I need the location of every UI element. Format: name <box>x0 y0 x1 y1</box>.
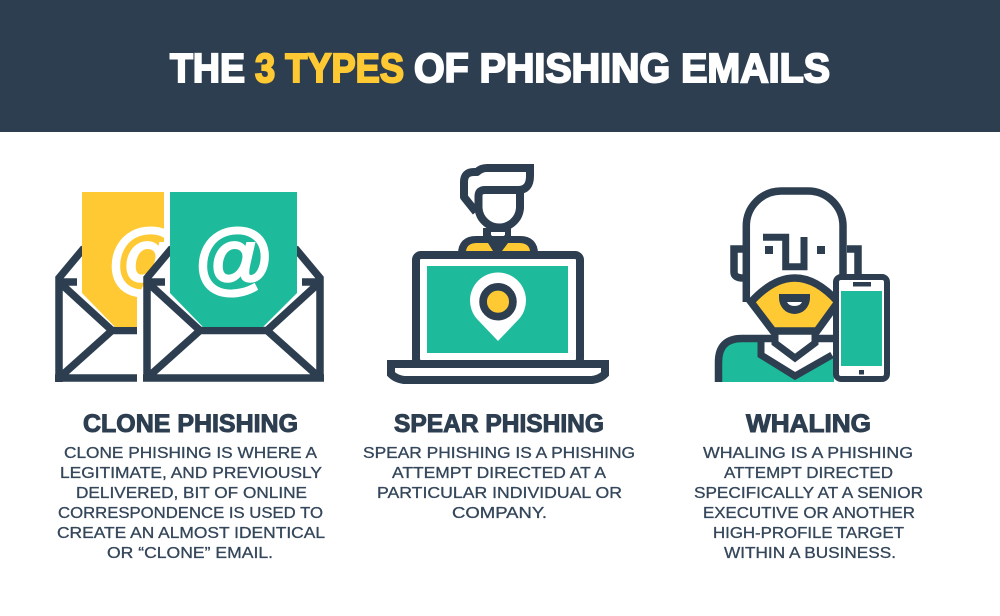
beard <box>751 278 838 331</box>
icon: bearded executive with phone <box>718 191 887 382</box>
heading: clone phishing: CLONE PHISHING <box>83 410 298 438</box>
title <box>170 45 830 91</box>
title: OF PHISHING EMAILS <box>414 45 830 91</box>
shirt <box>718 338 834 382</box>
front envelope with teal sheet: @ <box>194 213 274 302</box>
laptop base <box>391 364 605 380</box>
heading: whaling: WHALING <box>746 410 871 438</box>
laptop screen <box>416 255 580 364</box>
text block: spear phishing description <box>363 445 635 522</box>
icon: cloned envelopes <box>55 192 324 388</box>
text block: clone phishing description: OR “CLONE” EMAIL. <box>107 545 273 562</box>
text block: whaling description: SPECIFICALLY AT A SENIOR <box>694 485 923 502</box>
head <box>746 191 843 302</box>
text block: whaling description: HIGH-PROFILE TARGET <box>713 525 904 542</box>
title: 3 TYPES <box>255 45 404 91</box>
face: brow and nose <box>763 237 804 267</box>
text block: whaling description: WHALING IS A PHISHING <box>703 445 913 462</box>
ears <box>734 249 743 278</box>
text block: spear phishing description: COMPANY. <box>452 505 547 522</box>
text block: whaling description <box>694 445 923 562</box>
header banner <box>0 0 1000 132</box>
person <box>462 164 534 254</box>
icon: map pin <box>470 272 526 341</box>
back envelope with yellow sheet: @ <box>107 213 187 302</box>
text block: clone phishing description: LEGITIMATE, AND PREVIOUSLY <box>60 465 322 482</box>
text block: whaling description: WITHIN A BUSINESS. <box>724 545 896 562</box>
text block: clone phishing description: CLONE PHISHING IS WHERE A <box>64 445 317 462</box>
text block: clone phishing description: CREATE AN ALMOST IDENTICAL <box>57 525 325 542</box>
icon: person at laptop <box>391 164 605 380</box>
back envelope with yellow sheet <box>55 192 187 388</box>
eyes <box>765 246 825 254</box>
text block: whaling description: ATTEMPT DIRECTED <box>724 465 893 482</box>
text block: whaling description: EXECUTIVE OR ANOTHER <box>703 505 915 522</box>
heading: spear phishing: SPEAR PHISHING <box>394 410 604 438</box>
text block: spear phishing description: ATTEMPT DIRECTED AT A <box>392 465 606 482</box>
icon: smartphone <box>836 277 887 379</box>
mouth <box>779 294 810 314</box>
text block: clone phishing description <box>57 445 325 562</box>
front envelope with teal sheet <box>143 192 324 378</box>
text block: spear phishing description: PARTICULAR INDIVIDUAL OR <box>377 485 622 502</box>
text block: clone phishing description: CORRESPONDENCE IS USED TO <box>58 505 323 522</box>
text block: clone phishing description: DELIVERED, BIT OF ONLINE <box>76 485 307 502</box>
text block: spear phishing description: SPEAR PHISHING IS A PHISHING <box>363 445 635 462</box>
title: THE <box>170 45 245 91</box>
